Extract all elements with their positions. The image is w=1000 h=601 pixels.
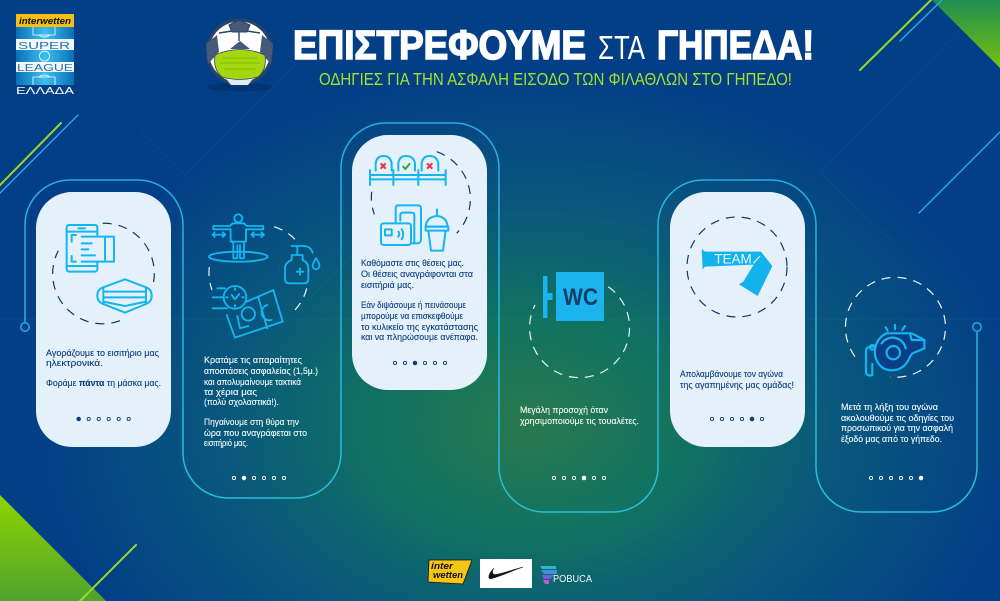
text: step 2: εισιτήριό μας. — [204, 438, 248, 449]
icon: contactless cards and drink — [381, 205, 448, 251]
pagination dots: step 4 — [552, 476, 606, 480]
text: step 1: ηλεκτρονικά. — [46, 358, 103, 369]
logo: interwetten sponsor — [428, 560, 472, 584]
text: step 3: Καθόμαστε στις θέσεις μας. — [361, 258, 464, 269]
text: step 3 — [361, 258, 478, 343]
text: step 3: και να πληρώσουμε ανέπαφα. — [361, 332, 478, 343]
logo: Super League Greece: SUPER — [18, 40, 71, 52]
text: step 2: ώρα που αναγράφεται στο — [204, 428, 307, 439]
text: step 3: εισιτήριά μας. — [361, 280, 414, 291]
text: step 2: Κρατάμε τις απαραίτητες — [204, 355, 302, 366]
subtitle: ΟΔΗΓΙΕΣ ΓΙΑ ΤΗΝ ΑΣΦΑΛΗ ΕΙΣΟΔΟ ΤΩΝ ΦΙΛΑΘΛΩΝ ΣΤΟ ΓΗΠΕΔΟ! — [319, 69, 792, 89]
text: step 4 — [520, 405, 639, 427]
text: step 3: το κυλικείο της εγκατάστασης — [361, 322, 478, 333]
title: ΣΤΑ — [598, 29, 645, 66]
icon: face mask — [97, 279, 152, 313]
text: step 5: Απολαμβάνουμε τον αγώνα — [680, 369, 783, 380]
icon: stadium seats — [370, 156, 446, 185]
logo: Nike sponsor — [480, 559, 532, 588]
text: step 5: της αγαπημένης μας ομάδας! — [680, 380, 794, 391]
text: step 2: (πολύ σχολαστικά!). — [204, 397, 279, 408]
text: step 2 — [204, 355, 318, 449]
decorative triangle: bottom left — [0, 495, 106, 601]
text: step 6: Μετά τη λήξη του αγώνα — [841, 402, 938, 413]
icon: hand sanitiser — [285, 246, 319, 283]
text: step 1: Φοράμε πάντα τη μάσκα μας. — [46, 378, 161, 389]
logo: Pobuca sponsor — [540, 566, 592, 585]
title: ΓΗΠΕΔΑ! — [657, 22, 814, 68]
icon: clock and pitch — [213, 286, 283, 338]
icon: team scarf: TEAM — [714, 251, 752, 266]
decorative triangle: top right — [932, 0, 1000, 68]
pagination dots: step 2 — [232, 476, 286, 480]
text: step 2: Πηγαίνουμε στη θύρα την — [204, 417, 299, 428]
icon: WC sign — [543, 272, 604, 321]
panel: step 5 enjoy the match — [670, 192, 805, 447]
panel: step 3 seats and canteen — [352, 135, 487, 390]
title — [293, 22, 814, 68]
text: step 3: μπορούμε να επισκεφθούμε — [361, 311, 464, 322]
text: step 2: αποστάσεις ασφαλείας (1,5μ.) — [204, 366, 318, 377]
panel: step 6 safe exit — [841, 277, 954, 480]
icon: team scarf — [702, 249, 772, 296]
pagination dots: step 1 — [77, 417, 130, 421]
text: step 1: Αγοράζουμε το εισιτήριο μας — [46, 348, 159, 359]
text: step 6 — [841, 402, 954, 445]
pagination dots: step 3 — [393, 361, 447, 365]
text: step 6: ακολουθούμε τις οδηγίες του — [841, 413, 954, 424]
logo: Super League Greece: LEAGUE — [17, 63, 73, 74]
text: step 2: τα χέρια μας — [204, 387, 257, 398]
text: step 2: και απολυμαίνουμε τακτικά — [204, 377, 301, 388]
pagination dots: step 6 — [869, 476, 923, 480]
text: step 3: Εάν διψάσουμε ή πεινάσουμε — [361, 300, 467, 311]
panel: step 1 ticket and mask — [36, 192, 171, 447]
text: step 5 — [680, 369, 794, 391]
text: step 4: χρησιμοποιούμε τις τουαλέτες. — [520, 416, 639, 427]
connecting outline through all steps — [21, 123, 981, 512]
icon: football wearing mask — [206, 18, 273, 92]
text: step 1 — [46, 348, 161, 389]
text: step 3: Οι θέσεις αναγράφονται στα — [361, 269, 473, 280]
logo: Pobuca sponsor: POBUCA — [553, 573, 592, 585]
logo: Super League Greece: interwetten — [19, 16, 71, 27]
panel: step 4 toilets — [520, 272, 639, 480]
icon: WC sign: WC — [563, 284, 598, 311]
logo: interwetten sponsor: wetten — [433, 570, 463, 581]
text: step 6: προσωπικού για την ασφαλή — [841, 423, 953, 434]
text: step 6: έξοδό μας από το γήπεδο. — [841, 434, 942, 445]
icon: phone with ticket — [67, 225, 114, 272]
panel: step 2 distance and hand hygiene — [204, 214, 319, 480]
title: ΕΠΙΣΤΡΕΦΟΥΜΕ — [293, 22, 586, 68]
logo: interwetten sponsor: inter — [431, 561, 454, 572]
icon: person keeping distance — [209, 214, 268, 262]
logo: Super League Greece — [16, 14, 74, 97]
logo: Super League Greece: ΕΛΛΑΔΑ — [16, 86, 74, 97]
text: step 4: Μεγάλη προσοχή όταν — [520, 405, 608, 416]
icon: whistle — [866, 325, 924, 375]
pagination dots: step 5 — [710, 417, 764, 421]
